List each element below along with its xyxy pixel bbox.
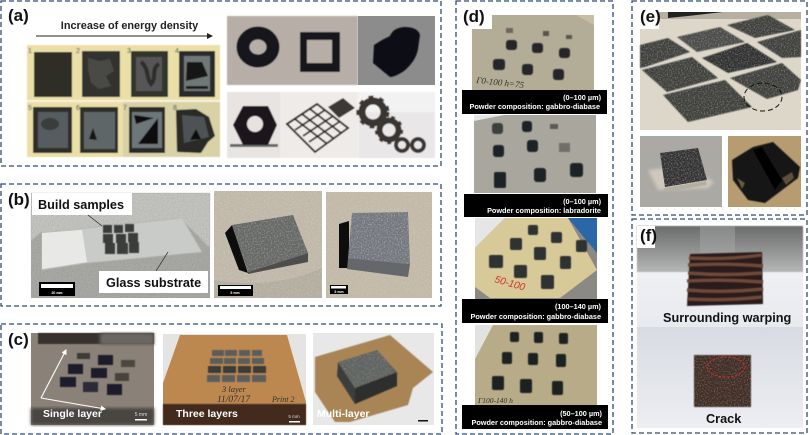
photo: crack xyxy=(637,327,803,428)
caption 4: (50–100 µm) xyxy=(560,409,603,418)
label: glass substrate xyxy=(99,271,208,293)
caption 4: Powder composition: gabbro-diabase xyxy=(471,418,602,427)
photo: plate on powder xyxy=(640,136,722,207)
label: (d) xyxy=(461,6,492,29)
caption 1: (0–100 µm) xyxy=(563,93,602,102)
label: build samples: Build samples xyxy=(38,198,124,212)
cube array xyxy=(337,350,397,404)
caption 1 xyxy=(462,90,607,114)
photo: lattice grids xyxy=(281,92,358,158)
caption 2 xyxy=(464,194,608,217)
caption 3: (100–140 µm) xyxy=(555,302,602,311)
red dashed ellipse: crack xyxy=(707,357,745,377)
glass substrate xyxy=(42,218,202,270)
photo: eight single-layer squares xyxy=(27,45,220,157)
photo 3: 100-140: 50-100 xyxy=(493,274,527,294)
panel: (f) defects xyxy=(632,219,807,433)
scale bar xyxy=(418,420,428,422)
numbers 1-8: 7 xyxy=(123,105,127,112)
scale bar: 5 mm xyxy=(334,290,344,294)
numbers 1-8: 8 xyxy=(173,105,177,112)
scale bar: 5 mm xyxy=(288,414,300,419)
photo 1: gabbro-diabase 0-100 xyxy=(472,15,594,90)
label: (c): (c) xyxy=(8,330,29,349)
photo 2: labradorite xyxy=(474,115,596,193)
photo: multi-layer xyxy=(313,333,434,425)
scale bar: 5 mm: 5 mm xyxy=(135,412,147,418)
photo: single layer xyxy=(31,333,154,425)
photo 3: 100-140 xyxy=(475,218,597,299)
numbers 1-8: 5 xyxy=(28,105,32,112)
photo 4: 50-100: Г100-140 h xyxy=(477,396,513,405)
caption 2: (0–100 µm) xyxy=(563,197,602,206)
numbers 1-8: 3 xyxy=(127,48,131,55)
photo: hex nut xyxy=(227,92,281,158)
panel: (e) thin plates xyxy=(632,1,807,215)
caption 4 xyxy=(462,405,608,429)
scale bar: 20 mm: 20 mm xyxy=(51,291,63,295)
sixteen tiles xyxy=(207,350,266,382)
caption 3: Powder composition: gabbro-diabase xyxy=(470,312,601,321)
scale bar: 20 mm xyxy=(39,282,75,296)
photo: gears xyxy=(358,92,435,158)
caption: crack: Crack xyxy=(706,412,742,426)
heading: increase of energy density: Increase of energy density xyxy=(61,20,198,32)
photo: glass substrate with samples xyxy=(31,193,210,298)
caption: single layer: Single layer xyxy=(43,408,102,420)
scale bar xyxy=(288,414,300,422)
label: build samples xyxy=(32,193,132,215)
panel: (b) build samples xyxy=(1,184,441,306)
nine build cubes xyxy=(103,224,139,254)
numbers 1-8 xyxy=(28,48,179,112)
numbers 1-8: 6 xyxy=(76,105,80,112)
caption: multi-layer: Multi-layer xyxy=(317,408,370,420)
eight plates xyxy=(640,15,801,122)
photo: lattice sample on powder xyxy=(326,192,432,298)
label: (e): (e) xyxy=(640,7,661,26)
numbers 1-8: 2 xyxy=(76,48,80,55)
photo 1: gabbro-diabase 0-100: Г0-100 h=75 xyxy=(475,75,525,90)
caption: three layers: Three layers xyxy=(176,408,238,420)
axis arrows xyxy=(41,350,66,398)
panel: (a) energy density and printed shapes xyxy=(1,1,441,166)
numbers 1-8: 1 xyxy=(28,48,32,55)
label: (a): (a) xyxy=(8,6,29,25)
label: (f): (f) xyxy=(640,226,657,245)
label: (b): (b) xyxy=(8,190,30,209)
label: glass substrate: Glass substrate xyxy=(106,276,201,290)
photo: torus and square frame xyxy=(227,16,358,85)
photo: glossy cube xyxy=(728,136,801,207)
panel: (d) powder compositions xyxy=(456,1,613,434)
nine melted squares xyxy=(60,353,135,395)
photo: three layers xyxy=(163,334,306,425)
dashed ellipse xyxy=(744,83,782,111)
photo: plates on cloth xyxy=(640,12,801,130)
arrow: energy density direction xyxy=(36,35,212,37)
photo: solid sample on powder xyxy=(214,191,322,298)
photo 4: 50-100 xyxy=(475,325,597,405)
handwriting: 11/07/17 xyxy=(217,395,251,405)
caption 1: Powder composition: gabbro-diabase xyxy=(469,102,600,111)
numbers 1-8: 4 xyxy=(175,48,179,55)
handwriting xyxy=(217,384,294,405)
caption 2: Powder composition: labradorite xyxy=(487,206,601,215)
white plate xyxy=(42,230,87,269)
label: (d): (d) xyxy=(463,7,485,26)
handwriting: Print 2 xyxy=(271,395,294,404)
panel: (c) layer counts xyxy=(1,324,442,434)
caption 3 xyxy=(462,299,608,323)
scale bar: 5 mm: 5 mm xyxy=(230,291,240,295)
photo: black tube part xyxy=(358,16,435,85)
photo: surrounding warping xyxy=(637,226,803,327)
caption: surrounding warping: Surrounding warping xyxy=(663,311,791,325)
handwriting: 3 layer xyxy=(221,384,247,394)
